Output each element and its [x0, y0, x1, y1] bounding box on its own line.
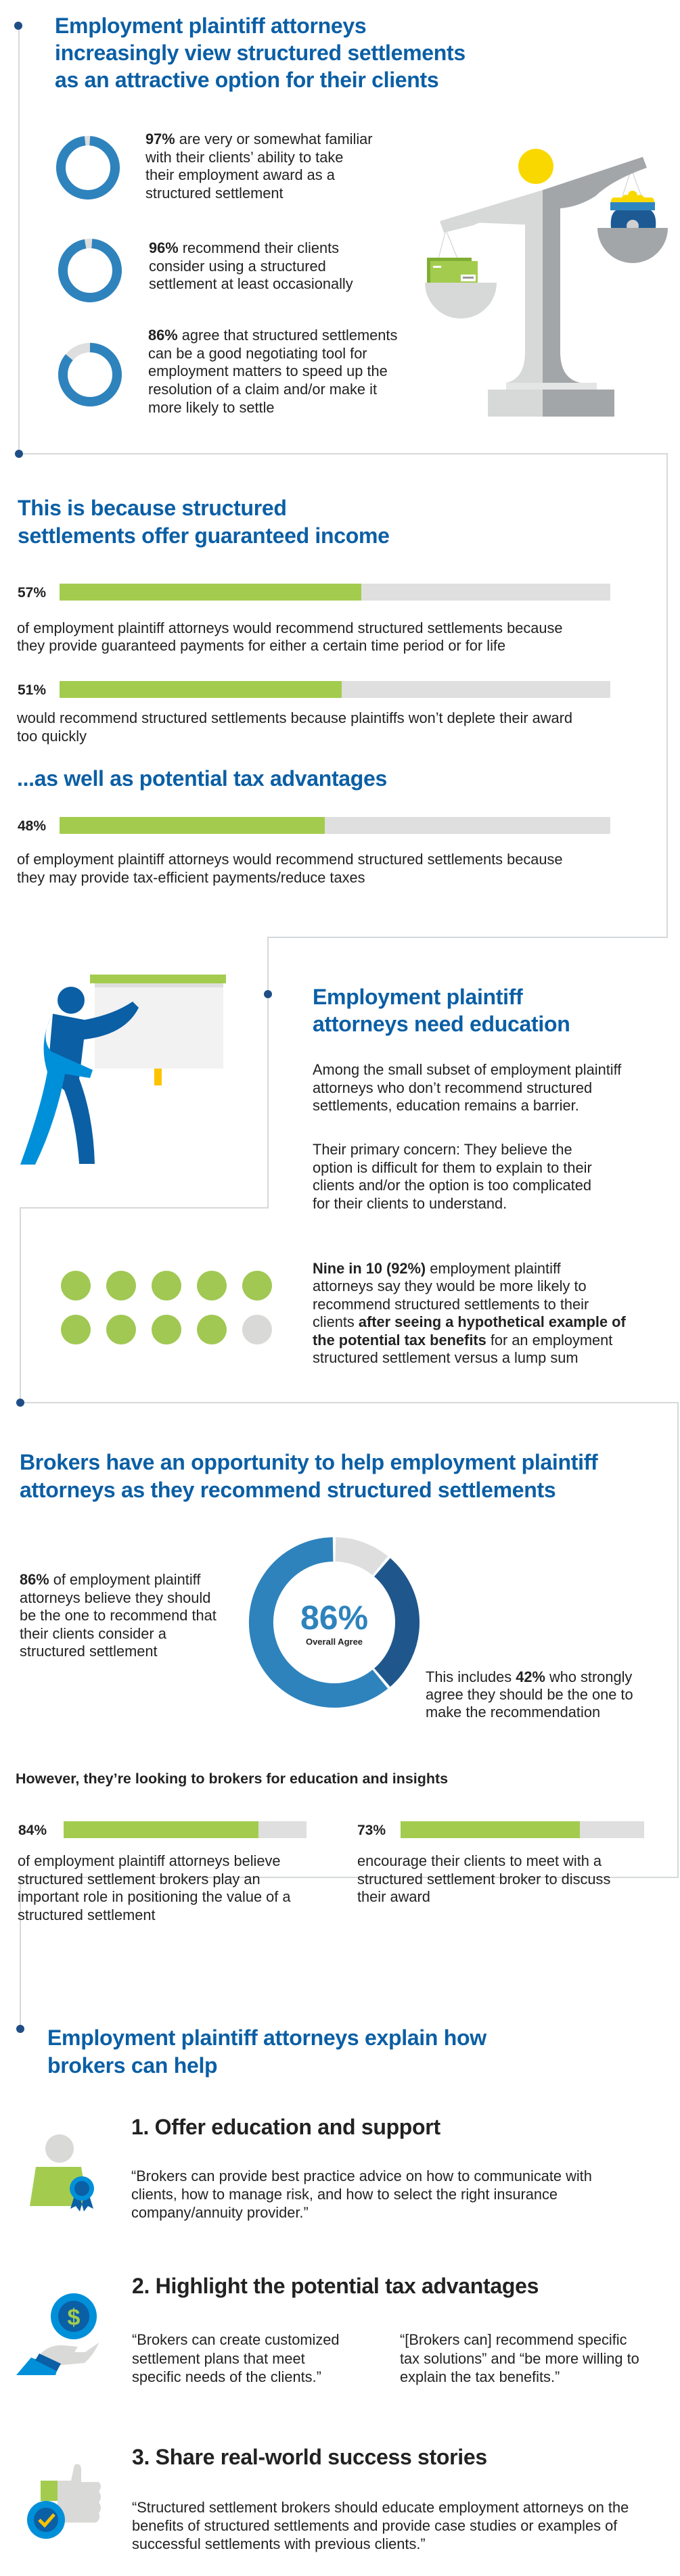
text: 42% strongly agree: agree they should be the one to [426, 1686, 633, 1703]
bar: 73% [357, 1821, 644, 1905]
title: as an attractive option for their clients [55, 68, 438, 92]
bar: 84%: structured settlement [18, 1906, 156, 1923]
text: education barrier: settlements, education remains a barrier. [313, 1097, 579, 1114]
donut chart: 86% overall agree: 86% [300, 1599, 368, 1637]
text: 42% strongly agree: This includes 42% who strongly [426, 1668, 632, 1685]
stat text: 96%: settlement at least occasionally [149, 275, 353, 292]
heading: guaranteed income: settlements offer guaranteed income [18, 523, 390, 548]
title [55, 14, 466, 92]
stat text: 86%: employment matters to speed up the [148, 362, 388, 379]
text: 42% strongly agree: make the recommendation [426, 1704, 600, 1720]
bar: 73%: 73% [357, 1823, 386, 1838]
step 2 [132, 2274, 639, 2385]
bar: 48%: they may provide tax-efficient payments/reduce taxes [17, 869, 365, 886]
step 2: specific needs of the clients.” [132, 2368, 321, 2385]
bar: 84%: structured settlement brokers play an [18, 1871, 260, 1888]
bar: 57% [17, 584, 610, 653]
heading: need education: attorneys need education [313, 1012, 570, 1036]
heading: how brokers can help: Employment plaintiff attorneys explain how [47, 2025, 486, 2050]
heading: tax advantages: ...as well as potential tax advantages [17, 766, 387, 791]
icon: person with award ribbon [30, 2134, 94, 2211]
step 3: successful settlements with previous clients.” [132, 2535, 426, 2552]
text: nine in 10 [313, 1260, 626, 1366]
step 2: 2. Highlight the potential tax advantages [132, 2274, 539, 2298]
bar: 48%: of employment plaintiff attorneys would recommend structured settlements because [17, 851, 563, 868]
step 2: “[Brokers can] recommend specific [400, 2331, 627, 2348]
icon: thumbs up with badge [27, 2464, 101, 2539]
step 1: “Brokers can provide best practice advice on how to communicate with [131, 2168, 592, 2184]
step 1: company/annuity provider.” [131, 2204, 309, 2221]
donut: 97% [56, 136, 120, 200]
step 1: clients, how to manage risk, and how to select the right insurance [131, 2186, 558, 2203]
text: 86% left: attorneys believe they should [20, 1589, 210, 1606]
heading: need education [313, 985, 570, 1036]
heading: how brokers can help: brokers can help [47, 2053, 217, 2078]
text: nine in 10: recommend structured settlements to their [313, 1296, 589, 1313]
bar: 48% [17, 817, 610, 886]
stat text: 86%: more likely to settle [148, 399, 275, 416]
stat text: 86%: can be a good negotiating tool for [148, 345, 367, 362]
donut chart: 86% overall agree: Overall Agree [306, 1637, 363, 1647]
bar: 57%: 57% [18, 585, 46, 601]
step 2: explain the tax benefits.” [400, 2368, 560, 2385]
heading: guaranteed income: This is because structured [18, 496, 287, 520]
donut: 96% [58, 239, 122, 302]
heading: brokers opportunity [20, 1450, 598, 1502]
text: 86% left: be the one to recommend that [20, 1607, 217, 1624]
step 2: “Brokers can create customized [132, 2331, 340, 2348]
icon: hand with dollar coin [16, 2293, 99, 2375]
bar: 57%: they provide guaranteed payments for either a certain time period or for life [17, 637, 505, 653]
bar: 84%: of employment plaintiff attorneys believe [18, 1852, 281, 1869]
bar: 51%: 51% [18, 682, 46, 698]
stat text: 86%: resolution of a claim and/or make it [148, 381, 377, 398]
text: 86% left: 86% of employment plaintiff [20, 1571, 200, 1588]
heading: brokers opportunity: Brokers have an opportunity to help employment plaintiff [20, 1450, 597, 1474]
step 3: benefits of structured settlements and provide case studies or examples of [132, 2517, 617, 2534]
step 2: tax solutions” and “be more willing to [400, 2349, 639, 2367]
heading: how brokers can help [47, 2025, 487, 2078]
text: nine in 10: clients after seeing a hypothetical example of [313, 1313, 626, 1330]
stat text: 96%: consider using a structured [149, 258, 326, 275]
stat text: 97%: 97% are very or somewhat familiar [145, 131, 373, 147]
heading: brokers opportunity: attorneys as they recommend structured settlements [20, 1478, 556, 1502]
bar: 84% [18, 1821, 307, 1923]
stat text: 96%: 96% recommend their clients [149, 239, 339, 256]
heading: need education: Employment plaintiff [313, 985, 522, 1009]
step 3: “Structured settlement brokers should educate employment attorneys on the [132, 2499, 629, 2516]
text: education barrier: Among the small subset of employment plaintiff [313, 1061, 621, 1078]
text: 42% strongly agree [426, 1668, 633, 1720]
step 2: settlement plans that meet [132, 2349, 305, 2367]
title: increasingly view structured settlements [55, 41, 466, 65]
bar: 57%: of employment plaintiff attorneys would recommend structured settlements because [17, 619, 563, 636]
bar: 84%: important role in positioning the value of a [18, 1888, 291, 1905]
text: primary concern: clients and/or the option is too complicated [313, 1177, 591, 1194]
stat text: 86%: 86% agree that structured settlements [148, 327, 397, 344]
bar: 73%: their award [357, 1888, 430, 1905]
text: education barrier [313, 1061, 621, 1114]
stat text: 86% [148, 327, 397, 416]
text: education barrier: attorneys who don’t recommend structured [313, 1079, 592, 1096]
text: nine in 10: the potential tax benefits for an employment [313, 1332, 612, 1349]
bar: 51% [17, 681, 610, 745]
donut: 86% [58, 343, 122, 406]
bar: 73%: encourage their clients to meet with a [357, 1852, 602, 1869]
step 1 [131, 2115, 592, 2221]
stat text: 97% [145, 131, 373, 202]
text: 86% left: their clients consider a [20, 1624, 166, 1642]
donut chart: 86% overall agree [249, 1537, 420, 1708]
step 1: 1. Offer education and support [131, 2115, 440, 2139]
bar: 51%: would recommend structured settlements because plaintiffs won’t deplete their award [17, 709, 572, 726]
text: primary concern: for their clients to understand. [313, 1194, 507, 1212]
illustration: balance scale [425, 149, 668, 417]
stat text: 97%: their employment award as a [145, 166, 335, 183]
icon: hand with dollar coin: $ [68, 2305, 81, 2331]
text: nine in 10: structured settlement versus a lump sum [313, 1349, 578, 1366]
step 3 [132, 2445, 629, 2552]
text: 86% left [20, 1571, 217, 1660]
bar: 73%: structured settlement broker to discuss [357, 1871, 610, 1888]
text: nine in 10: attorneys say they would be more likely to [313, 1278, 587, 1294]
step 3: 3. Share real-world success stories [132, 2445, 487, 2469]
text: 86% left: structured settlement [20, 1643, 158, 1660]
stat text: 97%: with their clients’ ability to take [145, 149, 343, 166]
stat text: 97%: structured settlement [145, 185, 284, 202]
heading: guaranteed income [18, 496, 390, 548]
illustration: presenter at board [20, 975, 226, 1165]
text: primary concern: Their primary concern: They believe the [313, 1141, 572, 1158]
title: Employment plaintiff attorneys [55, 14, 366, 38]
text: primary concern: option is difficult for them to explain to their [313, 1159, 592, 1175]
text: primary concern [313, 1141, 592, 1212]
bar: 84%: 84% [18, 1823, 47, 1838]
text: nine in 10: Nine in 10 (92%) employment plaintiff [313, 1260, 561, 1277]
dot chart: 9 in 10 [61, 1271, 272, 1344]
stat text: 96% [149, 239, 353, 292]
bar: 48%: 48% [18, 818, 46, 834]
subheading: looking to brokers: However, they’re looking to brokers for education and insights [16, 1771, 448, 1787]
bar: 51%: too quickly [17, 728, 87, 745]
